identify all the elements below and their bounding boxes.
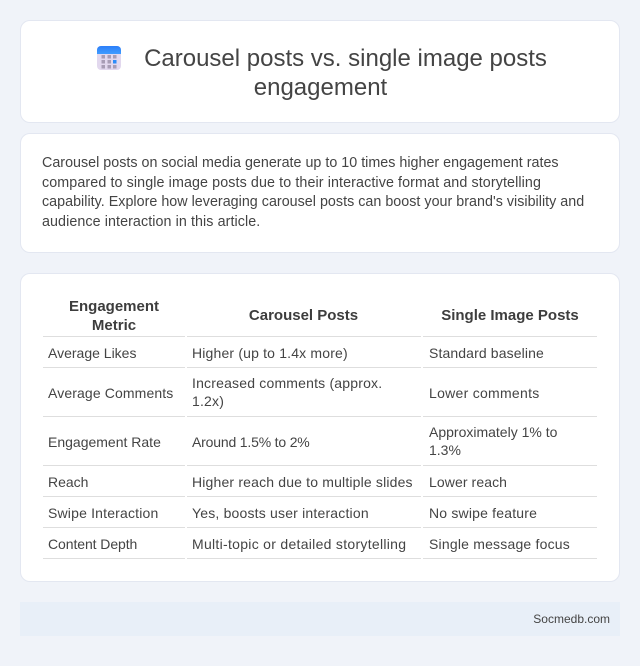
- text block: introduction: compared to single image posts due to their interactive format and storytelling: [42, 174, 541, 190]
- table header: Metric: [92, 317, 136, 334]
- title: [144, 45, 547, 101]
- title: Carousel posts vs. single image posts: [144, 45, 547, 72]
- row: reach: Lower reach: [429, 474, 507, 490]
- title: engagement: [254, 74, 387, 101]
- text block: introduction: [42, 155, 584, 230]
- icon: calendar: [97, 46, 121, 70]
- row: average comments: [48, 375, 540, 409]
- table header: Engagement: [69, 298, 159, 315]
- table header: Carousel Posts: [249, 307, 358, 324]
- row: swipe interaction: Swipe Interaction: [48, 505, 158, 521]
- row: engagement rate: Engagement Rate: [48, 434, 161, 450]
- row: content depth: Single message focus: [429, 536, 570, 552]
- row: swipe interaction: [48, 505, 537, 521]
- row: engagement rate: 1.3%: [429, 442, 461, 458]
- row: average likes: Higher (up to 1.4x more): [192, 345, 348, 361]
- table header: [69, 298, 579, 334]
- row: average comments: 1.2x): [192, 393, 224, 409]
- row: reach: Reach: [48, 474, 88, 490]
- row: reach: Higher reach due to multiple slides: [192, 474, 413, 490]
- row: average likes: [48, 345, 544, 361]
- panel: comparison table: [20, 273, 620, 582]
- panel: title card: [20, 20, 620, 123]
- text block: introduction: Carousel posts on social media generate up to 10 times higher engagement rates: [42, 155, 559, 171]
- row: swipe interaction: No swipe feature: [429, 505, 537, 521]
- row: engagement rate: Around 1.5% to 2%: [192, 434, 310, 450]
- row: engagement rate: Approximately 1% to: [429, 424, 557, 440]
- text block: introduction: audience interaction in this article.: [42, 214, 260, 230]
- row: reach: [48, 474, 507, 490]
- row: average comments: Lower comments: [429, 385, 540, 401]
- row: average comments: Average Comments: [48, 385, 173, 401]
- footer bar: [20, 602, 620, 636]
- row: swipe interaction: Yes, boosts user interaction: [192, 505, 369, 521]
- row: engagement rate: [48, 424, 557, 458]
- row: content depth: Content Depth: [48, 536, 137, 552]
- table header: Single Image Posts: [441, 307, 579, 324]
- row: average comments: Increased comments (approx.: [192, 375, 382, 391]
- footer source text: Socmedb.com: [533, 612, 610, 626]
- row: content depth: Multi-topic or detailed storytelling: [192, 536, 406, 552]
- row: average likes: Standard baseline: [429, 345, 544, 361]
- row: content depth: [48, 536, 570, 552]
- text block: introduction: capability. Explore how leveraging carousel posts can boost your brand's visibility and: [42, 194, 584, 210]
- panel: introduction: [20, 133, 620, 253]
- row: average likes: Average Likes: [48, 345, 136, 361]
